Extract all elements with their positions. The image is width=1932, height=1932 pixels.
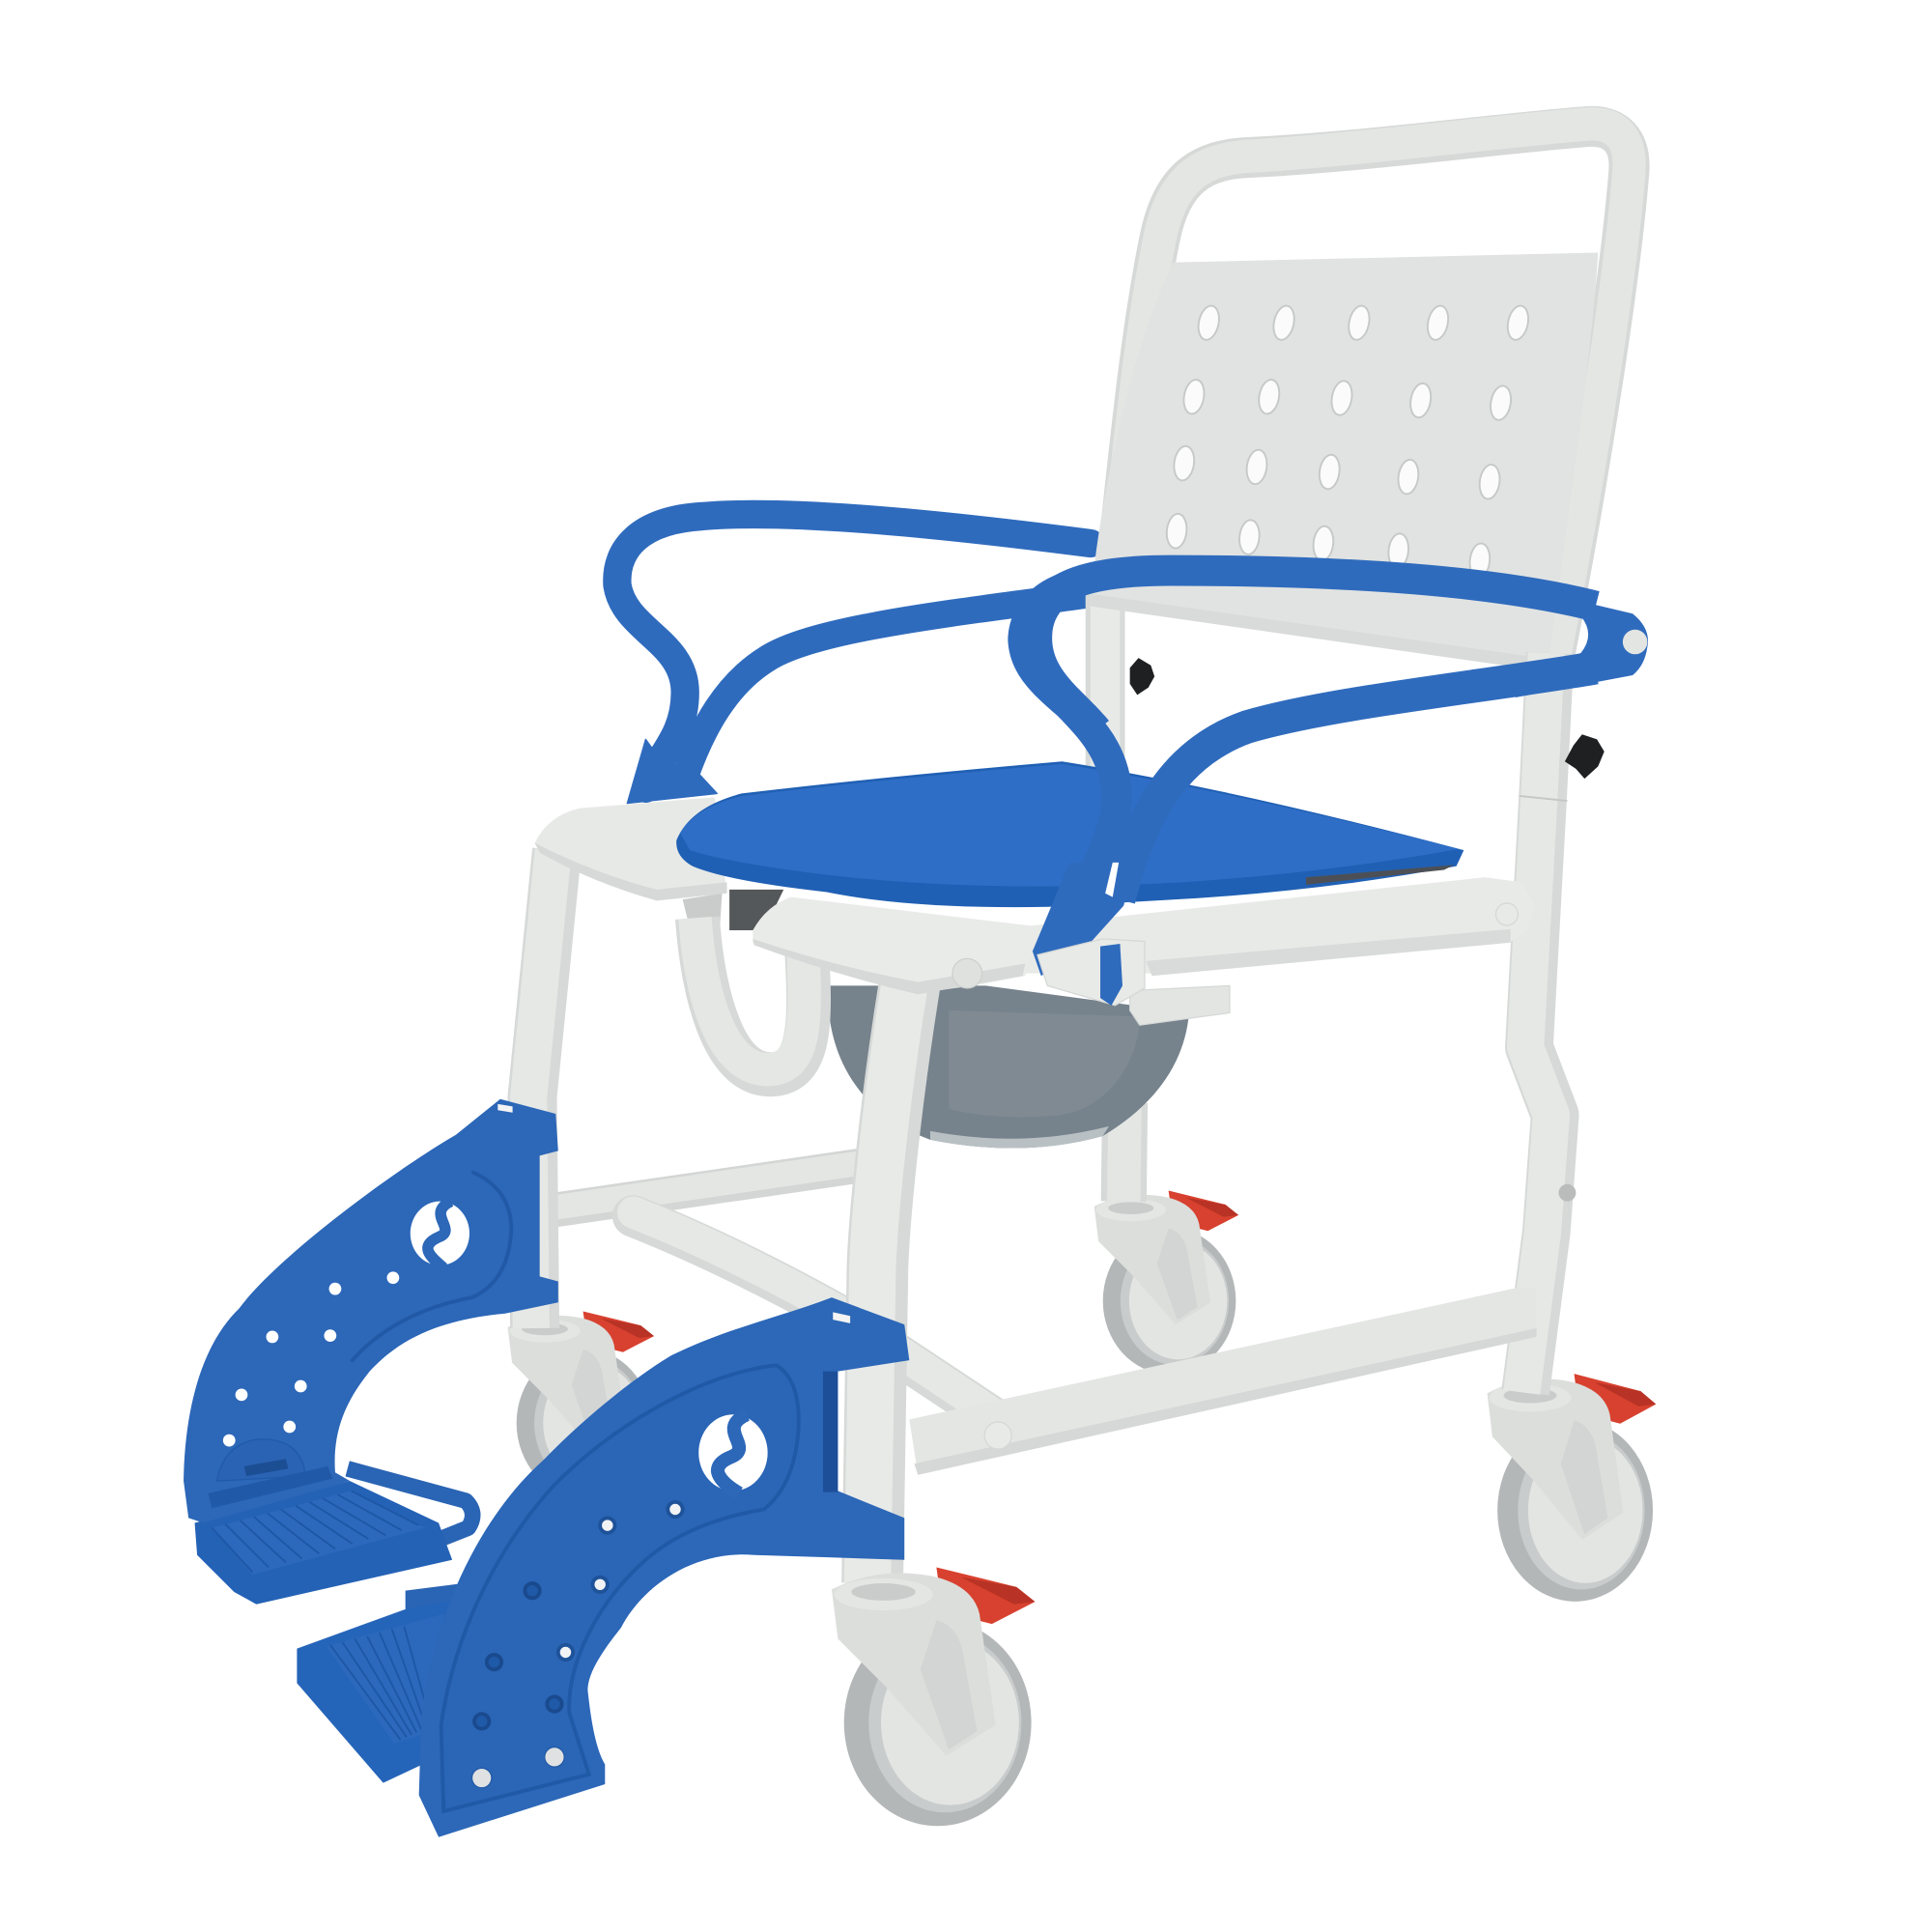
near front leg xyxy=(867,985,909,1583)
pan bracket and U-tube xyxy=(683,890,809,1074)
far logo cutout xyxy=(411,1202,469,1267)
near armrest xyxy=(1008,569,1648,976)
near adjustment holes xyxy=(558,1502,683,1660)
far top clip xyxy=(497,1104,513,1113)
seat pad xyxy=(676,761,1463,907)
backrest ventilation holes xyxy=(1165,304,1531,579)
front seat piece xyxy=(753,897,1037,994)
far adjustment holes xyxy=(223,1271,399,1446)
caster: rear right xyxy=(1488,1374,1656,1602)
right rear post xyxy=(1520,653,1576,1392)
footrest screws xyxy=(472,1747,564,1788)
backrest panel xyxy=(1091,252,1598,671)
caster: front xyxy=(832,1567,1035,1826)
commode bowl xyxy=(828,985,1189,1149)
near logo cutout xyxy=(698,1414,768,1493)
near foot plate xyxy=(297,1583,464,1783)
seat frame side rail xyxy=(1023,877,1535,976)
caster: rear inner xyxy=(1094,1191,1238,1375)
far foot plate xyxy=(195,1468,472,1605)
adjustment knobs xyxy=(1130,658,1605,779)
far footrest xyxy=(184,1099,558,1605)
far support arch xyxy=(184,1099,558,1523)
left front leg xyxy=(528,850,557,1328)
far hinge xyxy=(209,1439,332,1508)
lower side rail xyxy=(909,1288,1537,1475)
armrest clasp xyxy=(1037,939,1230,1025)
backrest handle frame xyxy=(1113,124,1629,666)
pivot cap xyxy=(1623,630,1647,654)
lower frame: cross and diagonal bars xyxy=(554,1103,1125,1417)
left seat piece xyxy=(535,797,727,900)
near footrest arch xyxy=(419,1297,909,1837)
caster: rear left xyxy=(508,1311,654,1497)
far armrest xyxy=(617,514,1091,804)
near top clip xyxy=(833,1312,850,1323)
rear post inner xyxy=(1090,591,1121,801)
